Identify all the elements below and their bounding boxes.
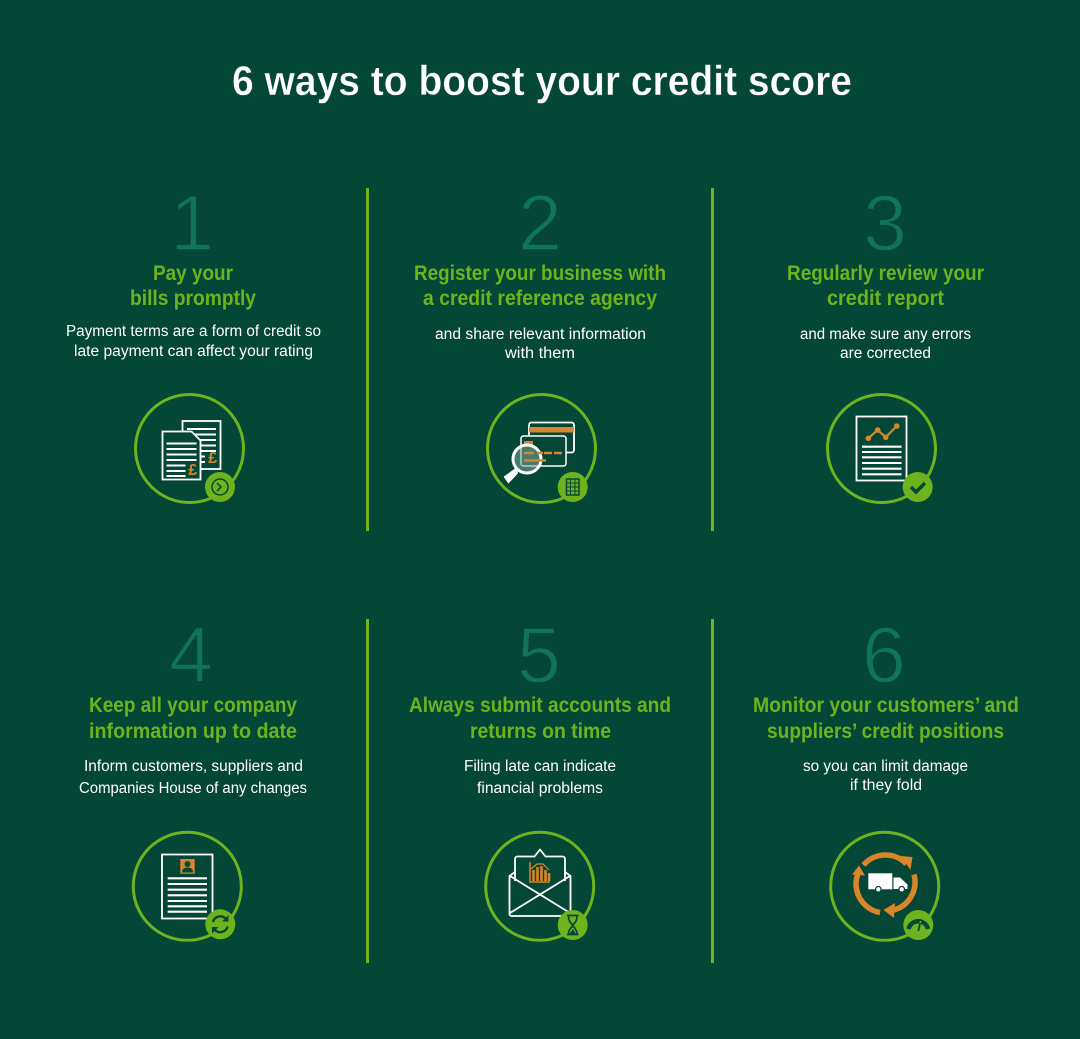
icon: credit cards with magnifier (488, 394, 596, 502)
icon: delivery truck cycle with gauge (831, 832, 939, 940)
heading: keep company information: Keep all your company (89, 694, 297, 717)
description: limit damage: if they fold (850, 777, 922, 794)
description: limit damage (803, 758, 968, 794)
title: 6 ways to boost your credit score (232, 57, 852, 104)
heading: submit accounts on time: Always submit accounts and (409, 694, 671, 717)
description: filing late: financial problems (477, 780, 603, 797)
description: filing late (464, 758, 616, 797)
description: errors corrected: and make sure any errors (800, 326, 971, 343)
heading: monitor customers and suppliers: suppliers’ credit positions (767, 720, 1004, 743)
heading: submit accounts on time (409, 694, 671, 743)
number 4: 4 (169, 610, 213, 699)
description: inform customers (79, 758, 307, 797)
panel: step 5 (409, 610, 671, 940)
icon: report with tick (828, 394, 936, 502)
heading: review credit report: Regularly review your (787, 262, 984, 285)
description: limit damage: so you can limit damage (803, 758, 968, 775)
heading: submit accounts on time: returns on time (470, 720, 611, 743)
heading: monitor customers and suppliers: Monitor your customers’ and (753, 694, 1019, 717)
heading: register your business: a credit reference agency (423, 287, 657, 310)
heading: review credit report (787, 262, 984, 310)
heading: review credit report: credit report (827, 287, 944, 310)
description: payment terms: late payment can affect your rating (74, 343, 313, 360)
panel: step 6 (753, 610, 1019, 940)
description: inform customers: Companies House of any changes (79, 780, 307, 797)
icon: profile document with refresh (133, 832, 241, 940)
number 1: 1 (170, 178, 214, 267)
panel: step 4 (79, 610, 307, 940)
heading: pay your bills promptly: bills promptly (130, 287, 256, 310)
description: errors corrected (800, 326, 971, 362)
heading: keep company information: information up to date (89, 720, 297, 743)
icon: invoices with clock: £ (188, 462, 197, 479)
panel: step 3 (787, 178, 984, 502)
description: filing late: Filing late can indicate (464, 758, 616, 775)
heading: keep company information (89, 694, 297, 743)
panel: step 1 (66, 178, 321, 502)
heading: pay your bills promptly: Pay your (153, 262, 233, 285)
description: share information (435, 326, 646, 362)
icon: invoices with clock (136, 394, 244, 502)
description: share information: and share relevant information (435, 326, 646, 343)
icon: invoices with clock: £ (208, 450, 217, 467)
number 2: 2 (518, 178, 562, 267)
number 3: 3 (863, 178, 907, 267)
heading: register your business (414, 262, 666, 310)
number 5: 5 (517, 610, 561, 699)
description: payment terms: Payment terms are a form of credit so (66, 323, 321, 340)
description: inform customers: Inform customers, suppliers and (84, 758, 303, 775)
description: share information: with them (504, 345, 575, 362)
number 6: 6 (862, 610, 906, 699)
heading: monitor customers and suppliers (753, 694, 1019, 743)
icon: envelope with chart and hourglass (486, 832, 594, 940)
heading: pay your bills promptly (130, 262, 256, 310)
panel: step 2 (414, 178, 666, 502)
description: errors corrected: are corrected (840, 345, 931, 362)
heading: register your business: Register your business with (414, 262, 666, 285)
description: payment terms (66, 323, 321, 360)
